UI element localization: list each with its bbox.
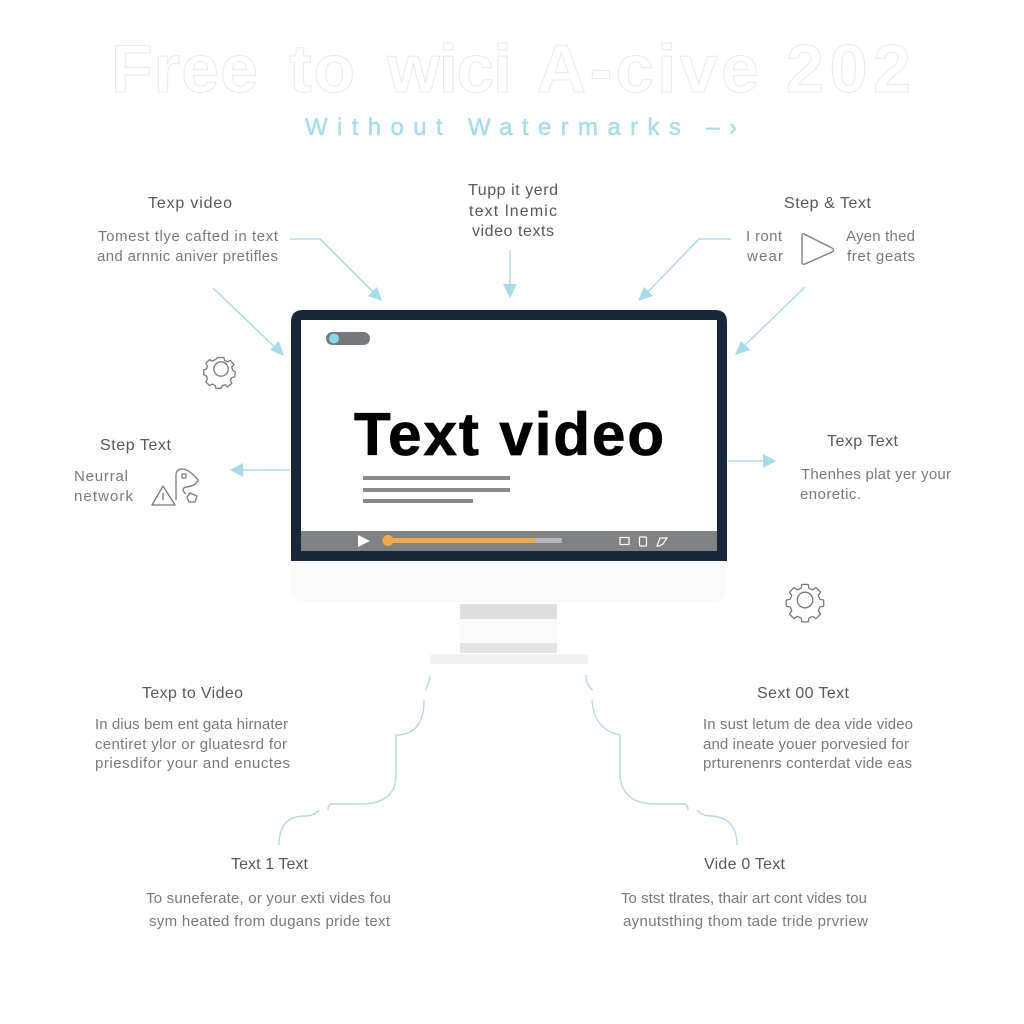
callout: lower left — [95, 685, 290, 772]
title: wici — [386, 31, 512, 107]
title: 202 — [786, 31, 911, 107]
callout: top left — [97, 195, 279, 265]
window toggle — [326, 332, 370, 345]
callout: bottom right: Vide 0 Text — [704, 856, 786, 873]
monitor screen — [301, 320, 717, 531]
connector: left bracket — [279, 675, 430, 845]
connector: right bracket — [586, 675, 737, 845]
icon: warning and network glyph — [152, 469, 198, 505]
callout: middle left: Neurral — [74, 468, 128, 485]
title: A-cive — [537, 31, 759, 107]
monitor stand neck — [460, 604, 557, 653]
callout: top centre: Tupp it yerd — [468, 182, 558, 199]
callout: bottom left: sym heated from dugans pride text — [149, 913, 391, 930]
callout: top centre — [468, 182, 558, 240]
monitor bezel — [291, 310, 727, 561]
monitor stand base — [430, 654, 588, 664]
callout: bottom right — [621, 856, 868, 930]
callout: middle left: network — [74, 488, 134, 505]
arrow: left middle — [230, 463, 290, 477]
callout: top centre: video texts — [472, 223, 554, 240]
icon: gear right — [786, 584, 824, 622]
callout: lower right: and ineate youer porvesied for — [703, 736, 909, 753]
callout: top right — [746, 195, 915, 265]
arrow: right middle — [728, 454, 776, 468]
play icon — [358, 535, 370, 547]
callout: bottom left: To suneferate, or your exti vides fou — [146, 890, 391, 907]
callout: bottom left: Text 1 Text — [231, 856, 309, 873]
progress bar — [390, 538, 562, 543]
callout: lower right — [703, 685, 913, 772]
icon: play outline — [802, 234, 834, 264]
callout: bottom left — [146, 856, 391, 930]
callout: lower right: In sust letum de dea vide video — [703, 716, 913, 733]
callout: top left: and arnnic aniver pretifles — [97, 248, 278, 265]
callout: top centre: text lnemic — [469, 203, 557, 220]
title — [111, 31, 911, 107]
callout: lower right: Sext 00 Text — [757, 685, 850, 702]
callout: middle right: Thenhes plat yer your — [801, 466, 951, 483]
callout: middle right — [800, 433, 951, 503]
callout: top left: Tomest tlye cafted in text — [98, 228, 279, 245]
monitor chin — [291, 561, 727, 603]
arrow: right diagonal — [735, 287, 805, 355]
callout: top right: Step & Text — [784, 195, 872, 212]
title: Free — [111, 31, 258, 107]
callout: top right: Ayen thed — [846, 228, 915, 245]
screen text lines — [363, 476, 510, 503]
video control bar — [301, 531, 717, 551]
arrow: top centre — [503, 250, 517, 298]
callout: top right: fret geats — [847, 248, 915, 265]
callout: bottom right: To stst tlrates, thair art cont vides tou — [621, 890, 867, 907]
arrow: top right to monitor — [638, 239, 731, 301]
callout: middle right: Texp Text — [827, 433, 899, 450]
callout: top left: Texp video — [148, 195, 232, 212]
title: to — [289, 31, 355, 107]
subtitle: Without Watermarks –› — [305, 114, 737, 141]
callout: bottom right: aynutsthing thom tade tride prvriew — [623, 913, 868, 930]
callout: lower left: Texp to Video — [142, 685, 243, 702]
callout: lower right: prturenenrs conterdat vide eas — [703, 755, 912, 772]
callout: top right: wear — [746, 248, 783, 265]
callout: middle left: Step Text — [100, 437, 172, 454]
callout: lower left: centiret ylor or gluatesrd for — [95, 736, 287, 753]
callout: lower left: priesdifor your and enuctes — [95, 755, 290, 772]
callout: lower left: In dius bem ent gata hirnater — [95, 716, 288, 733]
icon: gear left — [204, 357, 235, 388]
callout: top right: I ront — [746, 228, 783, 245]
screen heading: Text video — [354, 401, 664, 468]
callout: middle left — [74, 437, 172, 505]
callout: middle right: enoretic. — [800, 486, 861, 503]
control icons — [620, 537, 667, 546]
arrow: left diagonal — [213, 288, 284, 356]
arrow: top left horizontal to monitor — [290, 239, 382, 301]
monitor — [291, 310, 727, 664]
